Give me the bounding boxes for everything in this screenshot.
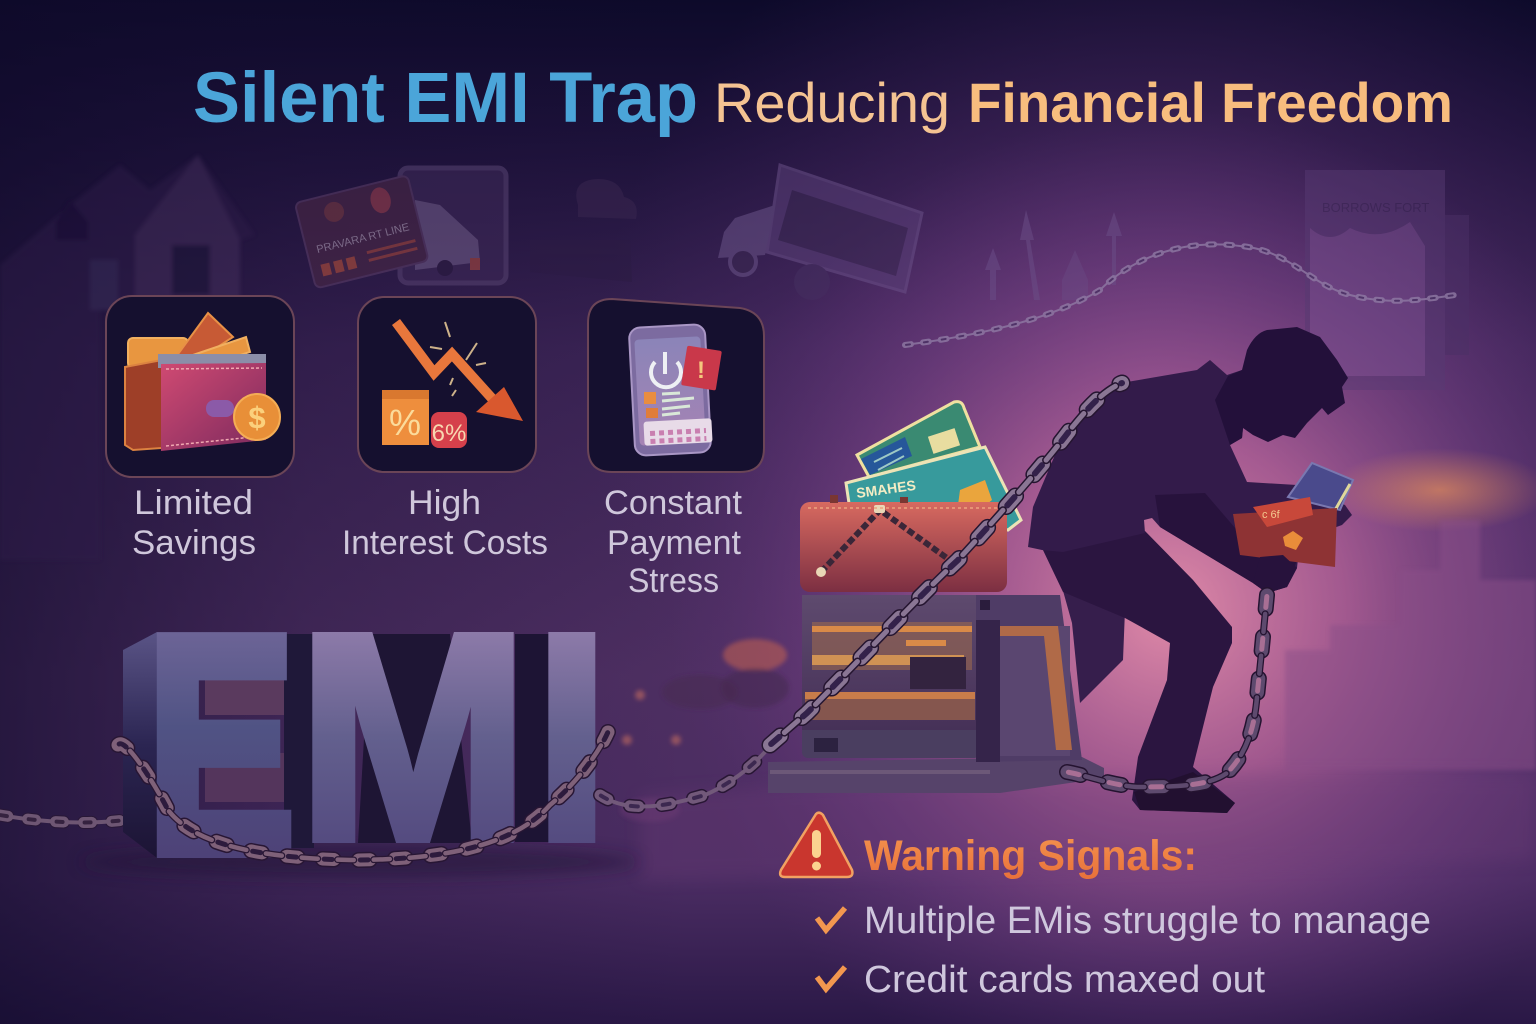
icon: wallet bbox=[125, 313, 280, 451]
label bbox=[342, 484, 548, 562]
faint background: rising arrows bbox=[985, 210, 1122, 300]
letter faces bbox=[147, 572, 610, 916]
faint background: distant city bbox=[1285, 520, 1536, 770]
front card bbox=[846, 447, 1021, 530]
main chain across strongbox bbox=[770, 383, 1122, 745]
label: High bbox=[408, 484, 481, 522]
man silhouette bbox=[1028, 327, 1352, 813]
3D EMI letters bbox=[123, 572, 610, 916]
label: Payment bbox=[607, 524, 742, 562]
shoe bbox=[1134, 772, 1235, 813]
label: Interest Costs bbox=[342, 524, 548, 562]
faint background: poster with text: BORROWS FORT bbox=[1322, 200, 1429, 215]
panel: high interest costs bbox=[342, 297, 548, 562]
icon: wallet: $ bbox=[248, 400, 266, 435]
faint background: credit card and truck bbox=[295, 168, 506, 289]
faint background: poster with text bbox=[1305, 170, 1469, 390]
panel: constant payment stress bbox=[588, 299, 764, 600]
hanging chain from hand bbox=[1067, 595, 1267, 787]
title: Financial Freedom bbox=[968, 71, 1453, 134]
box body bbox=[802, 595, 980, 730]
strongbox and base bbox=[768, 595, 1104, 793]
letter faces: I bbox=[534, 573, 610, 902]
card background bbox=[588, 299, 764, 472]
item one: Multiple EMis struggle to manage bbox=[864, 900, 1431, 942]
faint background: floating chain bbox=[905, 244, 1455, 345]
base platform bbox=[768, 757, 1104, 793]
title bbox=[193, 59, 1453, 138]
icon: phone with alert: ! bbox=[697, 357, 705, 384]
front leg and foot bbox=[1042, 531, 1235, 813]
faint background: delivery truck bbox=[530, 165, 922, 300]
title: Silent EMI Trap bbox=[193, 59, 698, 138]
right ground chain bbox=[600, 740, 775, 807]
back card bbox=[857, 402, 980, 477]
heading: Warning Signals: bbox=[864, 832, 1197, 880]
gripping hand bbox=[1253, 555, 1297, 593]
card background bbox=[106, 296, 294, 477]
label: Limited bbox=[134, 484, 253, 522]
faint background: credit card and truck: PRAVARA RT LINE bbox=[315, 221, 411, 256]
rear leg bbox=[1060, 580, 1125, 703]
purse body bbox=[800, 502, 1007, 592]
faint background: house bbox=[0, 155, 255, 560]
label bbox=[604, 484, 743, 600]
held wallet bbox=[1233, 463, 1353, 593]
clouds and bokeh right of EMI bbox=[620, 639, 789, 822]
icon: phone with alert bbox=[629, 324, 722, 456]
purse with cards: SMAHES bbox=[855, 477, 917, 501]
forearm shade bbox=[1155, 493, 1297, 593]
ground bbox=[80, 774, 1536, 880]
torso and arms bbox=[1028, 360, 1352, 593]
panel: limited savings bbox=[106, 296, 294, 562]
card background bbox=[358, 297, 536, 472]
title: Reducing bbox=[714, 71, 950, 134]
label: Stress bbox=[628, 562, 719, 600]
label: Constant bbox=[604, 484, 743, 522]
item two: Credit cards maxed out bbox=[864, 959, 1265, 1001]
head bbox=[1215, 327, 1348, 445]
label bbox=[132, 484, 256, 562]
held wallet: c 6f bbox=[1262, 509, 1281, 521]
icon: falling arrow with percent tags: 6% bbox=[432, 420, 466, 447]
icon: falling arrow with percent tags: % bbox=[389, 402, 421, 443]
purse with cards bbox=[800, 402, 1021, 592]
label: Savings bbox=[132, 524, 256, 562]
warning signals block bbox=[780, 813, 1431, 1001]
chain wrapped around EMI bbox=[118, 732, 608, 860]
letter faces: M bbox=[298, 572, 528, 902]
left ground chain bbox=[0, 815, 125, 822]
icon: falling arrow with percent tags bbox=[382, 322, 523, 448]
icon: warning triangle bbox=[780, 813, 852, 877]
letter faces: E bbox=[147, 572, 295, 916]
letter sides bbox=[123, 632, 549, 858]
